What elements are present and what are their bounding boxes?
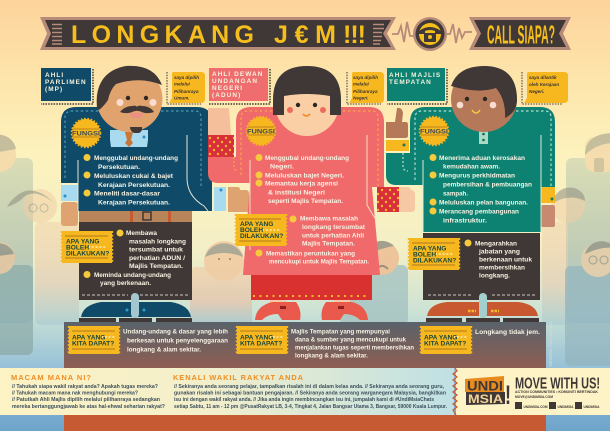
crowd person lower left <box>0 242 33 355</box>
coupon: what we get 2: APA YANG <box>240 334 273 342</box>
label: Ahli Majlis Tempatan: AHLI MAJLIS <box>389 72 441 79</box>
bottom results panel <box>64 322 546 368</box>
bubble: elected: saya dipilih <box>174 75 199 80</box>
trousers <box>423 233 540 300</box>
text: ADUN functions <box>256 154 349 205</box>
figure: MP <box>41 66 249 322</box>
logo: undi msia: MSIA <box>468 394 503 406</box>
text: MP actions: Membawa <box>126 230 157 237</box>
text: councillor functions: sampah. <box>443 190 468 198</box>
text: councillor functions: pembersihan & pembuangan <box>443 182 532 188</box>
bubble: appointed: saya dilantik <box>529 75 557 80</box>
trousers <box>79 222 192 300</box>
heading: kenali wakil rakyat: KENALI WAKIL RAKYAT ANDA <box>173 373 304 382</box>
text: result 2: dana & sumber yang mencukupi untuk <box>295 336 406 344</box>
text: ADUN actions <box>256 216 369 266</box>
text: kenali wakil rakyat: // Sekiranya anda seorang pelajar, tampalkan risalah ini di dalam kelas anda. // Sekiranya anda seorang guru, <box>174 384 445 390</box>
text: result 2: Majlis Tempatan yang mempunyai <box>291 328 390 336</box>
figure: ADUN <box>208 66 415 320</box>
head: MP <box>96 66 162 133</box>
text: result 2: longkang & alam sekitar. <box>295 352 368 360</box>
coupon: what can be done, ADUN: BOLEH <box>240 227 263 234</box>
bubble: appointed <box>522 72 568 104</box>
text: MP actions: Majlis Tempatan. <box>129 263 183 270</box>
jacket seams <box>78 135 208 211</box>
coupon: what can be done, ADUN <box>236 214 286 246</box>
right hand and cuff <box>214 187 249 212</box>
text: councillor actions: Mengarahkan <box>475 240 517 248</box>
text: MP functions: Persekutuan. <box>98 164 140 171</box>
text: kenali wakil rakyat: setiap Sabtu, 11 am - 12 pm @PusatRakyat LB, 3-4, Tingkat 4, Jalan Bangsar Utama 3, Bangsar, 59000 Kuala Lumpur. <box>174 404 448 410</box>
title text: LONGKANG <box>71 21 254 49</box>
text: ADUN functions: & institusi Negeri <box>268 190 325 196</box>
label: Ahli Majlis Tempatan <box>387 68 447 104</box>
logo: undi msia: UNDI <box>467 378 503 394</box>
info strip <box>0 368 610 415</box>
text: ADUN actions: Membawa masalah <box>300 216 358 222</box>
label: ADUN: (ADUN) <box>212 92 241 99</box>
text: macam mana ni: mereka bertanggungjawab ke atas hal-ehwal seharian rakyat? <box>12 404 165 410</box>
text: ADUN actions: longkang tersumbat <box>302 224 366 231</box>
kurta seams <box>423 135 541 232</box>
crowd person centre right moustache <box>340 241 408 325</box>
raised arm <box>208 108 250 183</box>
badge: fungsi <box>72 119 100 147</box>
text: councillor actions: jabatan yang <box>478 248 520 256</box>
text: ADUN functions: Memantau kerja agensi <box>265 180 338 188</box>
text: ADUN actions: mencukupi untuk Majlis Tempatan. <box>269 258 369 266</box>
coupon: what can be done, ADUN: DILAKUKAN? <box>240 233 283 240</box>
coupon: what can be done, councillor: BOLEH <box>413 252 436 258</box>
text: councillor functions <box>430 154 532 224</box>
text: ADUN functions: Menggubal undang-undang <box>265 155 349 162</box>
crowd person right lower glasses <box>565 241 610 366</box>
background crowd <box>0 133 610 366</box>
label: ADUN: UNDANGAN <box>212 78 258 85</box>
coupon: what can be done, councillor <box>409 238 459 270</box>
shoes <box>79 293 192 322</box>
text: result 2: menjalankan tugas seperti membersihkan <box>295 344 414 352</box>
thumbs-up arm <box>386 108 410 185</box>
text: kenali wakil rakyat: isu ini dengan wakil rakyat anda. // Jika anda ingin membincangkan isu ini, jumpalah kami di #UndiMsiaChats <box>174 397 434 403</box>
badge: fungsi: FUNGSI <box>247 128 275 136</box>
call to action: MOVE@UNDIMSIA.COM <box>515 395 553 399</box>
text: result 1 <box>123 328 228 354</box>
text: macam mana ni: // Patutkah Ahli Majlis dipilih melalui pilihanraya sedangkan <box>12 397 160 403</box>
coupon: what can be done, MP: BOLEH <box>66 244 89 252</box>
right cuff and hand <box>541 187 555 227</box>
title exclamation: !!! <box>343 21 366 49</box>
crowd person right top beard <box>566 133 610 323</box>
coupon: what we get 3: KITA DAPAT? <box>424 340 466 348</box>
text: result 1: berkesan untuk penyelenggaraan <box>127 338 228 344</box>
crowd person centre left <box>190 241 252 325</box>
social links: UNDIMSIA <box>558 405 574 409</box>
pulse line <box>392 22 472 43</box>
belt <box>79 211 192 222</box>
title text JEM: J€M <box>274 21 336 49</box>
text: ADUN functions: Meluluskan bajet Negeri. <box>265 172 344 180</box>
text: councillor functions: Menerima aduan kerosakan <box>439 155 525 162</box>
bubble: appointed: oleh Kerajaan <box>529 82 559 87</box>
bubble: elected: Pilihanraya <box>174 89 199 94</box>
label: Ahli Parlimen <box>41 68 93 104</box>
text: MP functions: Meneliti dasar-dasar <box>94 190 160 198</box>
right hand and cuff <box>377 187 415 212</box>
crowd person right middle <box>542 187 585 325</box>
social links <box>515 402 600 409</box>
text: councillor actions: membersihkan <box>479 264 525 272</box>
label: Ahli Parlimen: AHLI <box>45 72 64 79</box>
coupon: what can be done, MP: APA YANG <box>66 238 99 246</box>
red skirt hem <box>251 275 372 300</box>
text: councillor functions: Merancang pembangunan <box>439 208 519 216</box>
text: ADUN actions: Memastikan peruntukan yang <box>266 250 355 258</box>
coupon: what can be done, ADUN: APA YANG <box>240 221 273 228</box>
text: result 2 <box>291 328 414 360</box>
text: councillor functions: Mengurus perkhidmatan <box>439 172 515 180</box>
coupon: what we get 1: APA YANG <box>72 334 105 342</box>
text: MP actions <box>84 230 186 287</box>
social links: UNDIMSIA <box>584 405 600 409</box>
label: ADUN <box>209 68 270 104</box>
bubble: elected <box>167 72 205 104</box>
text: councillor actions: longkang. <box>479 272 510 280</box>
badge: fungsi <box>247 117 275 145</box>
text: macam mana ni: // Tahukah macam mana nak menghubungi mereka? <box>12 390 138 396</box>
text: result 3: Longkang tidak jem. <box>475 329 540 336</box>
bubble: elected state: saya dipilih <box>353 75 378 80</box>
text: ADUN functions: seperti Majlis Tempatan. <box>268 198 343 205</box>
text: MP actions: Meminda undang-undang <box>94 272 171 279</box>
dress seams <box>250 135 376 250</box>
collar <box>479 127 488 144</box>
text: councillor actions: berkenaan untuk <box>479 256 532 264</box>
text: MP actions: masalah longkang <box>129 238 186 246</box>
logo: undi msia: ! <box>505 380 511 410</box>
dress <box>236 107 384 275</box>
badge: fungsi: FUNGSI <box>72 130 100 138</box>
badge: fungsi <box>420 117 448 145</box>
label: Ahli Parlimen: (MP) <box>45 86 63 93</box>
design credit: DESIGN: TAN ZI HAO <box>548 322 553 366</box>
left hand and cuff <box>61 185 78 226</box>
bubble: appointed: Negeri. <box>529 89 545 94</box>
text: MP functions: Kerajaan Persekutuan. <box>98 182 170 189</box>
text: MP functions <box>84 154 178 206</box>
call siapa banner <box>469 17 571 50</box>
coupon: what we get 3 <box>421 326 471 354</box>
bubble: elected state: melalui <box>353 82 370 86</box>
text: MP functions: Kerajaan Persekutuan. <box>98 200 170 206</box>
text: councillor functions: infrastruktur. <box>443 218 487 224</box>
text: MP functions: Meluluskan cukai & bajet <box>94 173 174 180</box>
text: ADUN functions: Negeri. <box>270 164 294 170</box>
coupon: what can be done, MP: DILAKUKAN? <box>66 250 109 258</box>
shirt and tie <box>110 130 148 147</box>
kurta <box>410 107 555 232</box>
text: councillor functions: Meluluskan pelan bangunan. <box>439 200 528 206</box>
text: ADUN actions: Majlis Tempatan. <box>302 240 355 248</box>
label: Ahli Majlis Tempatan: TEMPATAN <box>389 79 432 86</box>
head: ADUN <box>273 66 341 136</box>
legs and shoes <box>255 298 368 320</box>
bottom band <box>64 415 546 431</box>
coupon: what can be done, councillor: APA YANG <box>413 246 446 252</box>
bubble: elected state: Negeri. <box>353 96 369 100</box>
call to action: ACTION COMMUNITIES • KOMUNITI BERTINDAK <box>515 390 598 394</box>
coupon: what we get 3: APA YANG <box>424 334 457 342</box>
label: ADUN: NEGERI <box>212 85 243 92</box>
coupon: what can be done, councillor: DILAKUKAN? <box>413 258 456 264</box>
text: kenali wakil rakyat <box>174 384 448 410</box>
figure: local councillor <box>386 66 568 322</box>
text: macam mana ni: // Tahukah siapa wakil rakyat anda? Apakah tugas mereka? <box>12 384 158 390</box>
bubble: elected state <box>347 72 384 104</box>
text: councillor functions: kemudahan awam. <box>443 164 500 170</box>
text: MP functions: Menggubal undang-undang <box>94 155 178 162</box>
text: MP actions: yang berkenaan. <box>100 280 151 287</box>
coupon: what we get 1: KITA DAPAT? <box>72 340 114 348</box>
shoes <box>426 293 539 322</box>
logo: undi msia <box>465 376 511 410</box>
badge: fungsi: FUNGSI <box>420 128 448 136</box>
bubble: elected state: Pilihanraya <box>353 89 378 94</box>
text: ADUN actions: untuk perhatian Ahli <box>302 232 364 240</box>
icon: telephone <box>413 17 447 51</box>
label: Ahli Parlimen: PARLIMEN <box>45 79 87 86</box>
coupon: what we get 2: KITA DAPAT? <box>240 340 282 348</box>
text: macam mana ni <box>12 384 165 410</box>
title banner <box>40 17 396 50</box>
coupon: what can be done, MP <box>62 231 112 263</box>
jacket <box>61 107 212 211</box>
crowd person glasses <box>7 189 79 325</box>
text: councillor actions <box>464 240 532 280</box>
text: result 1: Undang-undang & dasar yang lebih <box>123 328 228 336</box>
bubble: elected: Umum. <box>174 96 190 100</box>
heading: macam mana ni: MACAM MANA NI? <box>11 373 91 382</box>
coupon: what we get 1 <box>69 326 119 354</box>
text: MP actions: tersumbat untuk <box>129 246 183 254</box>
text: result 1: longkang & alam sekitar. <box>127 346 201 354</box>
label: ADUN: AHLI DEWAN <box>212 71 263 78</box>
coupon: what we get 2 <box>237 326 287 354</box>
text: MP actions: perhatian ADUN / <box>129 255 185 262</box>
bubble: elected: melalui <box>174 82 191 86</box>
call to action <box>515 376 600 399</box>
crowd person left top <box>0 135 33 323</box>
text: kenali wakil rakyat: gunakan risalah ini sebagai bantuan pengajaran. // Sekiranya anda seorang warganegara Malaysia, bangkitkan <box>174 390 446 396</box>
social links: UNDIMSIA.COM <box>524 405 548 409</box>
head: councillor <box>451 66 517 132</box>
